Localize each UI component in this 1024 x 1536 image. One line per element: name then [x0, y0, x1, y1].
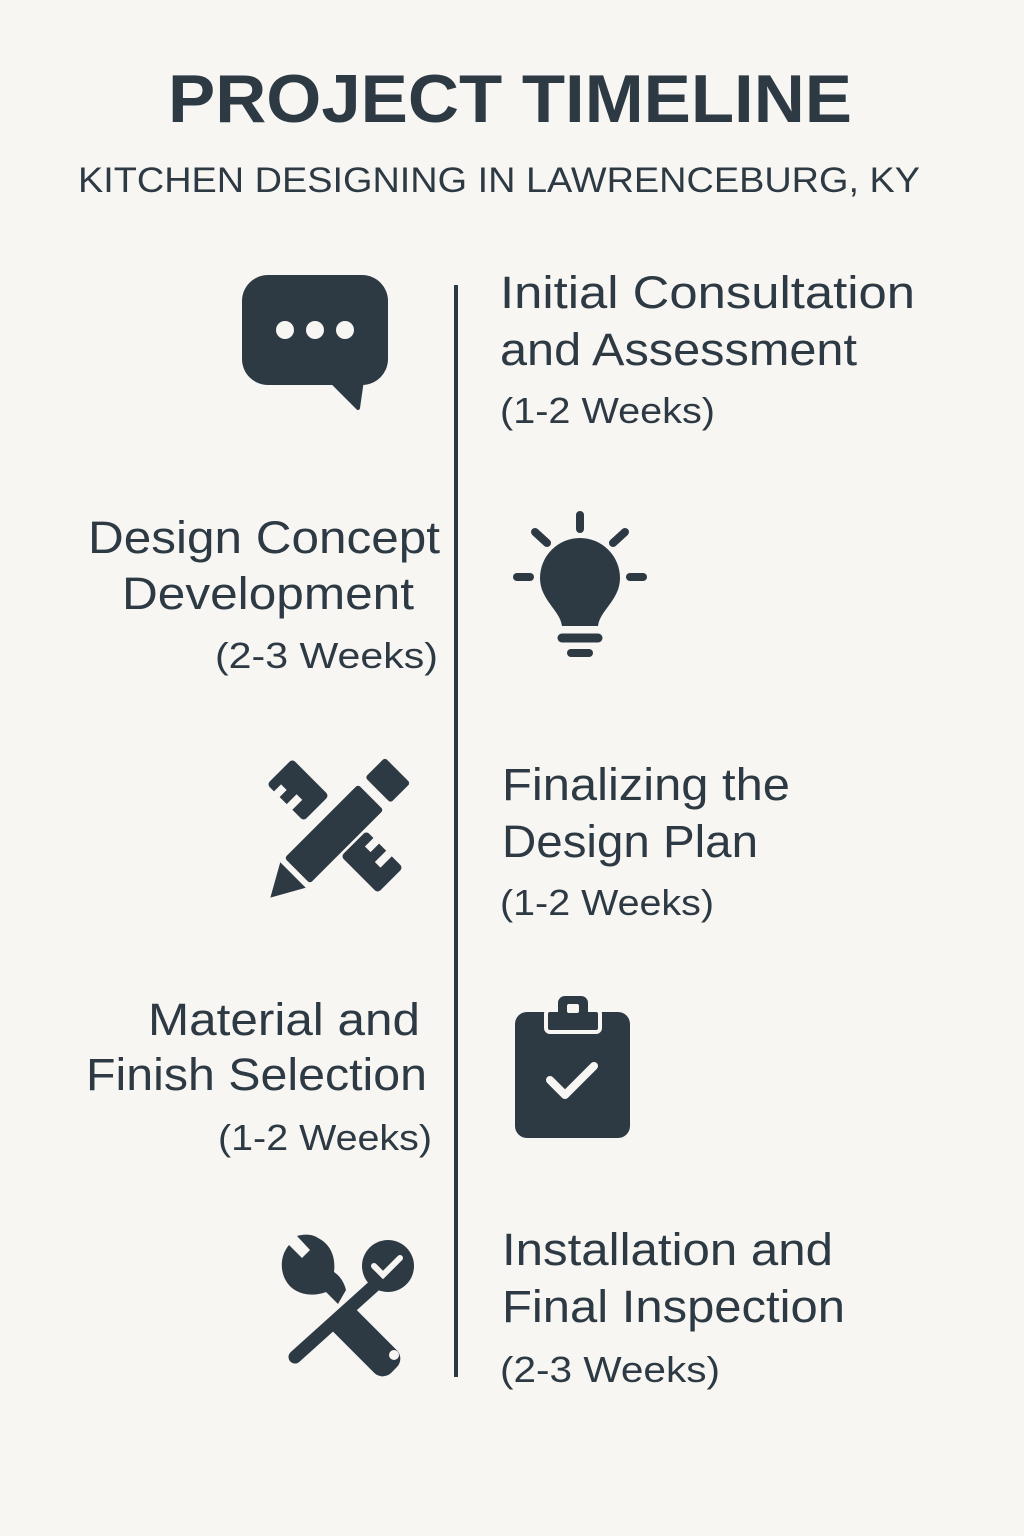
text: step 1: (1-2 Weeks)	[500, 390, 715, 431]
text: step 2	[88, 512, 441, 676]
text: step 1: and Assessment	[500, 324, 858, 375]
icon: light bulb	[517, 515, 643, 653]
step 2: design concept	[88, 512, 643, 676]
icon: clipboard	[515, 996, 630, 1138]
text: step 5	[500, 1224, 845, 1390]
text: step 1	[500, 267, 915, 431]
text: step 4	[86, 994, 432, 1158]
text: step 2: Development	[122, 568, 415, 619]
text: step 5: Final Inspection	[502, 1281, 845, 1332]
text: step 4: (1-2 Weeks)	[218, 1117, 432, 1158]
icon: pencil and ruler	[258, 758, 410, 910]
step 5: installation	[282, 1224, 845, 1390]
text: step 3: Finalizing the	[502, 759, 790, 810]
icon: chat bubble	[242, 275, 388, 408]
title: PROJECT TIMELINE	[168, 61, 852, 137]
text: step 4: Material and	[148, 994, 420, 1045]
text: step 4: Finish Selection	[86, 1049, 427, 1100]
text: step 2: Design Concept	[88, 512, 441, 563]
text: step 5: (2-3 Weeks)	[500, 1349, 720, 1390]
text: step 3: Design Plan	[502, 816, 758, 867]
icon: wrench and screwdriver	[282, 1235, 414, 1381]
timeline line	[454, 285, 458, 1377]
text: step 1: Initial Consultation	[500, 267, 915, 318]
step 3: finalizing design	[258, 758, 790, 923]
text: step 3: (1-2 Weeks)	[500, 882, 714, 923]
text: step 2: (2-3 Weeks)	[215, 635, 438, 676]
text: step 3	[500, 759, 790, 923]
step 1: initial consultation	[242, 267, 915, 431]
text: step 5: Installation and	[502, 1224, 833, 1275]
subtitle: KITCHEN DESIGNING IN LAWRENCEBURG, KY	[78, 161, 920, 200]
step 4: material selection	[86, 994, 630, 1158]
